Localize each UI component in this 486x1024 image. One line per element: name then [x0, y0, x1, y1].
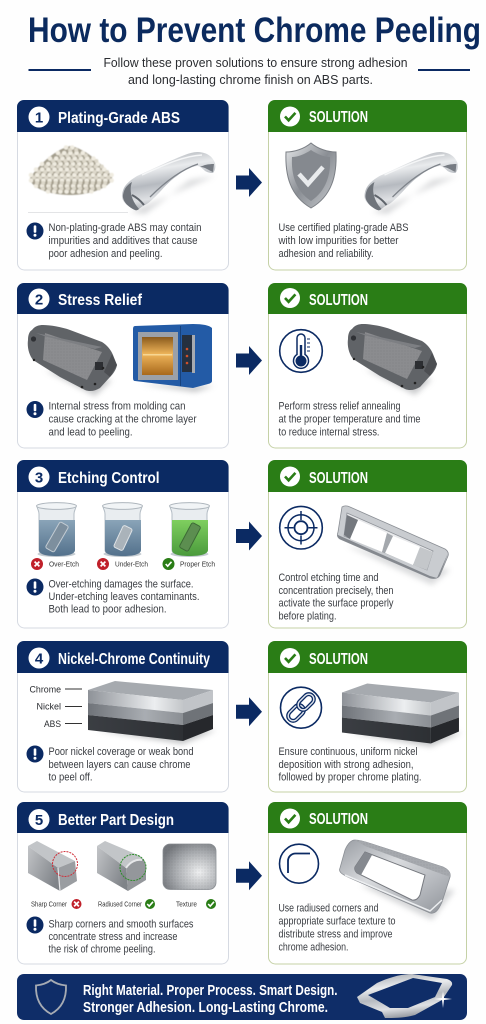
icon: target [280, 506, 322, 549]
layer labels: Nickel [36, 702, 61, 712]
corner labels: Texture [176, 900, 197, 908]
panel: solution 5 [268, 802, 467, 964]
panel: problem 2 stress relief: 2 [35, 292, 43, 308]
solution text [278, 902, 396, 954]
beaker: over-etch [36, 503, 76, 557]
panel: problem 3 etching control: 3 [35, 470, 43, 486]
icon: molded housing [348, 324, 437, 395]
icon: warning [26, 578, 44, 596]
problem text: poor adhesion and peeling. [48, 248, 162, 260]
panel: solution 2: SOLUTION [309, 292, 368, 309]
arrow 3 [236, 522, 262, 550]
solution text: with low impurities for better [278, 235, 399, 247]
icon: chrome bezel with sparkle [357, 974, 452, 1018]
problem text: Sharp corners and smooth surfaces [48, 918, 194, 930]
banner text: Stronger Adhesion. Long-Lasting Chrome. [83, 1000, 328, 1016]
solution text: Control etching time and [278, 572, 379, 584]
problem text: Non-plating-grade ABS may contain [48, 222, 202, 234]
layered block diagram [88, 681, 216, 744]
arrow 1 [236, 168, 262, 197]
layered block diagram [342, 684, 462, 746]
problem text: Under-etching leaves contaminants. [48, 591, 200, 603]
problem text: Poor nickel coverage or weak bond [48, 746, 194, 758]
panel: solution 5: SOLUTION [309, 811, 368, 828]
solution text: Perform stress relief annealing [278, 400, 401, 412]
panel: solution 3 [268, 460, 467, 628]
panel: solution 4: SOLUTION [309, 651, 368, 668]
icon: ABS pellets pile [30, 146, 113, 195]
etch status labels: Proper Etch [180, 560, 215, 568]
problem text: concentrate stress and increase [48, 931, 178, 943]
icon: textured chrome frame [340, 840, 455, 920]
icon: warning [26, 401, 44, 418]
radiused corner sample [97, 841, 146, 891]
panel: problem 2 stress relief [17, 283, 228, 448]
solution text: appropriate surface texture to [278, 916, 396, 928]
problem text [48, 400, 197, 438]
panel: solution 2 [268, 283, 467, 448]
solution text: Use radiused corners and [278, 902, 379, 914]
problem text: to peel off. [48, 772, 92, 784]
arrow 5 [236, 861, 262, 890]
etch status labels [31, 558, 215, 570]
icon: annealing oven [133, 324, 214, 392]
icon: shield outline [36, 980, 66, 1014]
icon: molded housing [28, 325, 117, 396]
banner text: Right Material. Proper Process. Smart Design. [83, 983, 338, 999]
panel: problem 5 better part design: Better Part Design [58, 812, 174, 829]
beaker: proper etch [170, 503, 210, 557]
panel: solution 1 [268, 100, 467, 270]
solution text [278, 746, 422, 784]
footer banner [17, 974, 467, 1020]
panel: problem 4 nickel-chrome continuity [17, 641, 228, 792]
subtitle [28, 56, 470, 87]
subtitle: and long-lasting chrome finish on ABS parts. [128, 73, 373, 87]
solution text: before plating. [278, 610, 336, 622]
icon: chrome frame part [337, 506, 450, 585]
solution text: Ensure continuous, uniform nickel [278, 746, 418, 758]
panel: problem 5 better part design [17, 802, 228, 964]
problem text: Both lead to poor adhesion. [48, 604, 166, 616]
arrow 2 [236, 346, 262, 375]
icon: thermometer [280, 330, 322, 372]
layer labels: ABS [44, 719, 61, 730]
panel: problem 2 stress relief: Stress Relief [58, 292, 143, 309]
icon: chain link [280, 687, 322, 728]
problem text: cause cracking at the chrome layer [48, 414, 197, 426]
arrow 4 [236, 697, 262, 726]
etch status labels: Under-Etch [115, 560, 148, 568]
problem text [48, 578, 200, 616]
icon: chrome handle [364, 152, 458, 214]
beaker: under-etch [102, 503, 142, 557]
solution text: activate the surface properly [278, 598, 394, 610]
problem text: Internal stress from molding can [48, 400, 186, 412]
icon: warning [26, 746, 44, 762]
icon: warning [26, 916, 44, 934]
corner labels: Sharp Corner [31, 900, 67, 908]
solution text [278, 222, 408, 260]
solution text: followed by proper chrome plating. [278, 772, 422, 784]
solution text: chrome adhesion. [278, 942, 348, 954]
etch status labels: Over-Etch [49, 560, 79, 568]
icon: warning [26, 222, 44, 240]
solution text: distribute stress and improve [278, 928, 393, 940]
panel: problem 4 nickel-chrome continuity: 4 [35, 650, 44, 668]
panel: solution 4 [268, 641, 467, 792]
problem text: between layers can cause chrome [48, 759, 191, 771]
panel: problem 1 plating-grade ABS [17, 100, 228, 270]
corner labels [31, 899, 216, 909]
solution text: deposition with strong adhesion, [278, 759, 414, 771]
panel: solution 3: SOLUTION [309, 470, 368, 487]
layer labels: Chrome [30, 684, 61, 696]
problem text [48, 918, 194, 956]
textured surface sample [163, 844, 216, 890]
layer labels [30, 684, 82, 730]
solution text: adhesion and reliability. [278, 248, 374, 260]
corner labels: Radiused Corner [98, 900, 142, 908]
solution text [278, 572, 394, 622]
icon: chrome handle [122, 152, 215, 214]
banner text [83, 983, 338, 1016]
panel: problem 1 plating-grade ABS: Plating-Grade ABS [58, 110, 180, 127]
problem text: and lead to peeling. [48, 426, 132, 438]
solution text: Use certified plating-grade ABS [278, 222, 408, 234]
sharp corner sample [28, 841, 78, 891]
panel: problem 3 etching control: Etching Control [58, 470, 160, 487]
solution text: at the proper temperature and time [278, 414, 421, 426]
problem text [48, 746, 194, 784]
problem text: the risk of chrome peeling. [48, 944, 156, 956]
panel: problem 4 nickel-chrome continuity: Nickel-Chrome Continuity [58, 651, 210, 668]
problem text: impurities and additives that cause [48, 235, 198, 247]
problem text: Over-etching damages the surface. [48, 578, 194, 590]
solution text: concentration precisely, then [278, 585, 394, 597]
panel: solution 1: SOLUTION [309, 109, 368, 126]
panel: problem 3 etching control [17, 460, 228, 628]
panel: problem 5 better part design: 5 [35, 812, 43, 829]
subtitle: Follow these proven solutions to ensure strong adhesion [104, 56, 408, 70]
problem text [48, 222, 202, 260]
icon: radiused corner [280, 844, 318, 883]
panel: problem 1 plating-grade ABS: 1 [35, 110, 43, 126]
icon: shield with check [286, 143, 336, 208]
solution text [278, 400, 421, 438]
solution text: to reduce internal stress. [278, 426, 380, 438]
